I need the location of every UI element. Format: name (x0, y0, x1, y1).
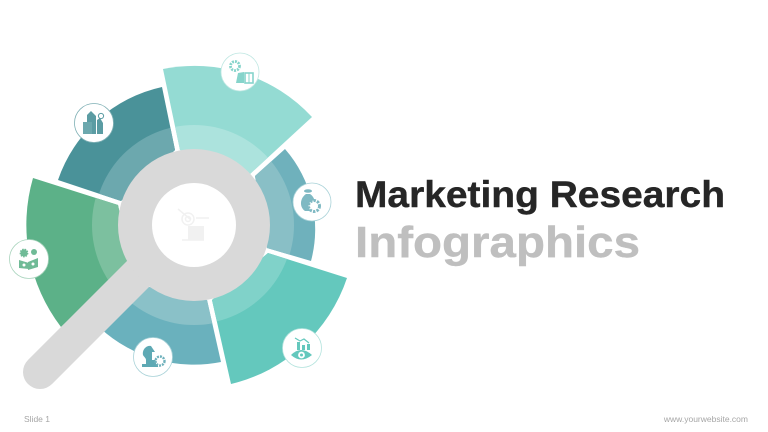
icon: chess knight and gear (134, 338, 172, 376)
title (355, 174, 725, 267)
icon: gears and banknotes (10, 240, 48, 278)
segment: green left (26, 178, 127, 327)
icon: eye and bar chart (282, 328, 322, 368)
title: Marketing Research (355, 174, 725, 215)
segment: blue teal bottom (104, 287, 221, 365)
segment: teal lower right (212, 253, 347, 384)
icon: gear with person and documents (221, 53, 259, 91)
segment: dark teal upper left (58, 87, 175, 201)
segment: blue teal right (255, 149, 316, 261)
icon: buildings and coin (74, 104, 114, 142)
footer: website: www.yourwebsite.com (663, 414, 748, 424)
icon: money bag and gear (293, 183, 331, 221)
title: Infographics (355, 218, 640, 267)
magnifying glass (40, 149, 270, 372)
footer: slide number: Slide 1 (24, 414, 50, 424)
icon: lens centre target and chart (178, 209, 209, 240)
segment: light aqua top (163, 66, 312, 174)
